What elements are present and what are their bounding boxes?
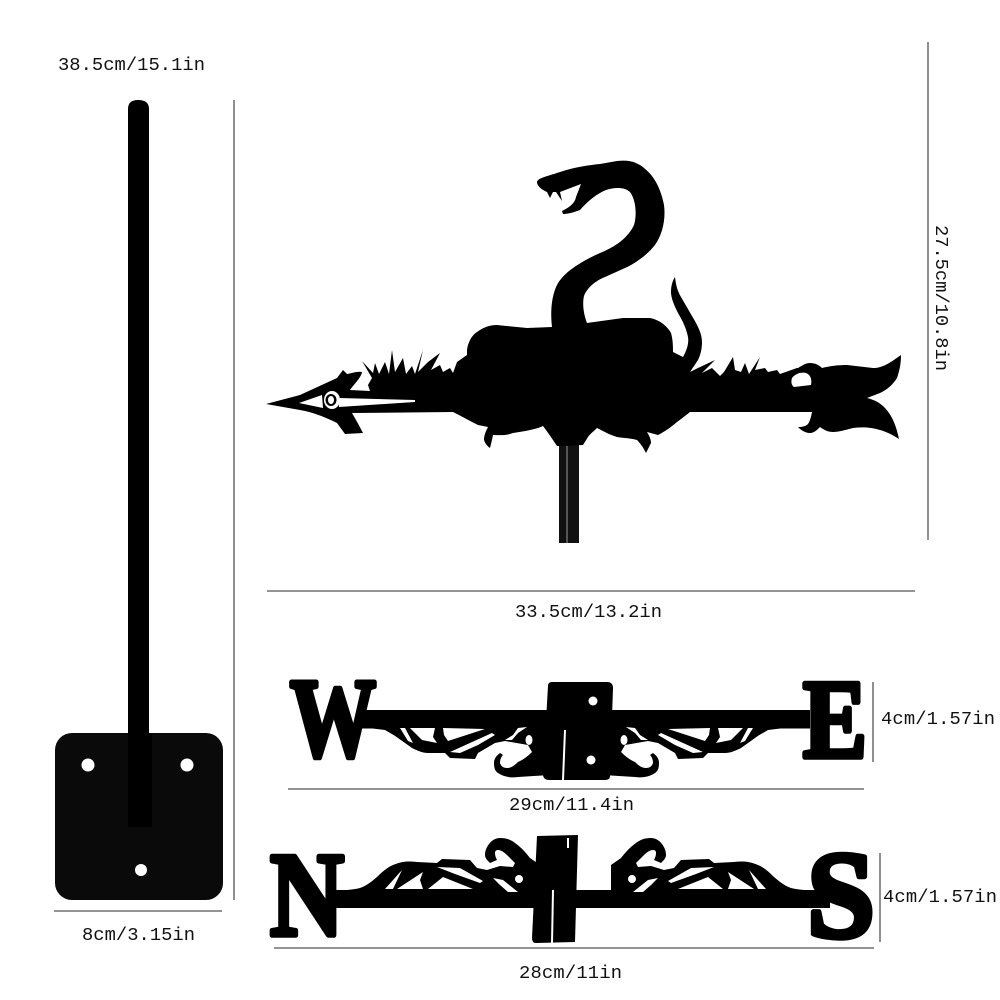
panel: north-south directional bar <box>270 827 997 984</box>
icon: vane support rod <box>559 440 579 543</box>
letter N: N <box>270 828 344 961</box>
dimension label: vane width: 33.5cm/13.2in <box>515 601 662 623</box>
panel: west-east directional bar <box>290 657 995 816</box>
dimension label: bar height: 4cm/1.57in <box>883 886 997 908</box>
dimension label: bar height: 4cm/1.57in <box>881 708 995 730</box>
icon: north-south bar with hinge and ornaments <box>335 835 830 943</box>
panel: mounting pole and base plate <box>55 54 223 946</box>
letter S: S <box>807 827 875 964</box>
letter E: E <box>803 658 867 782</box>
dimension label: pole length: 38.5cm/15.1in <box>58 54 205 76</box>
letter W: W <box>290 657 376 781</box>
icon: vertical pole <box>128 100 149 735</box>
icon: west-east bar with hinge and ornaments <box>360 682 810 780</box>
icon: square base plate with screw holes <box>55 733 223 900</box>
dimension label: vane height: 27.5cm/10.8in <box>930 225 952 371</box>
dimension label: plate width: 8cm/3.15in <box>82 924 195 946</box>
icon: snake on arrow silhouette <box>266 161 901 453</box>
dimension label: bar width: 29cm/11.4in <box>509 794 634 816</box>
panel: snake weather vane <box>266 161 952 623</box>
dimension label: bar width: 28cm/11in <box>519 962 622 984</box>
